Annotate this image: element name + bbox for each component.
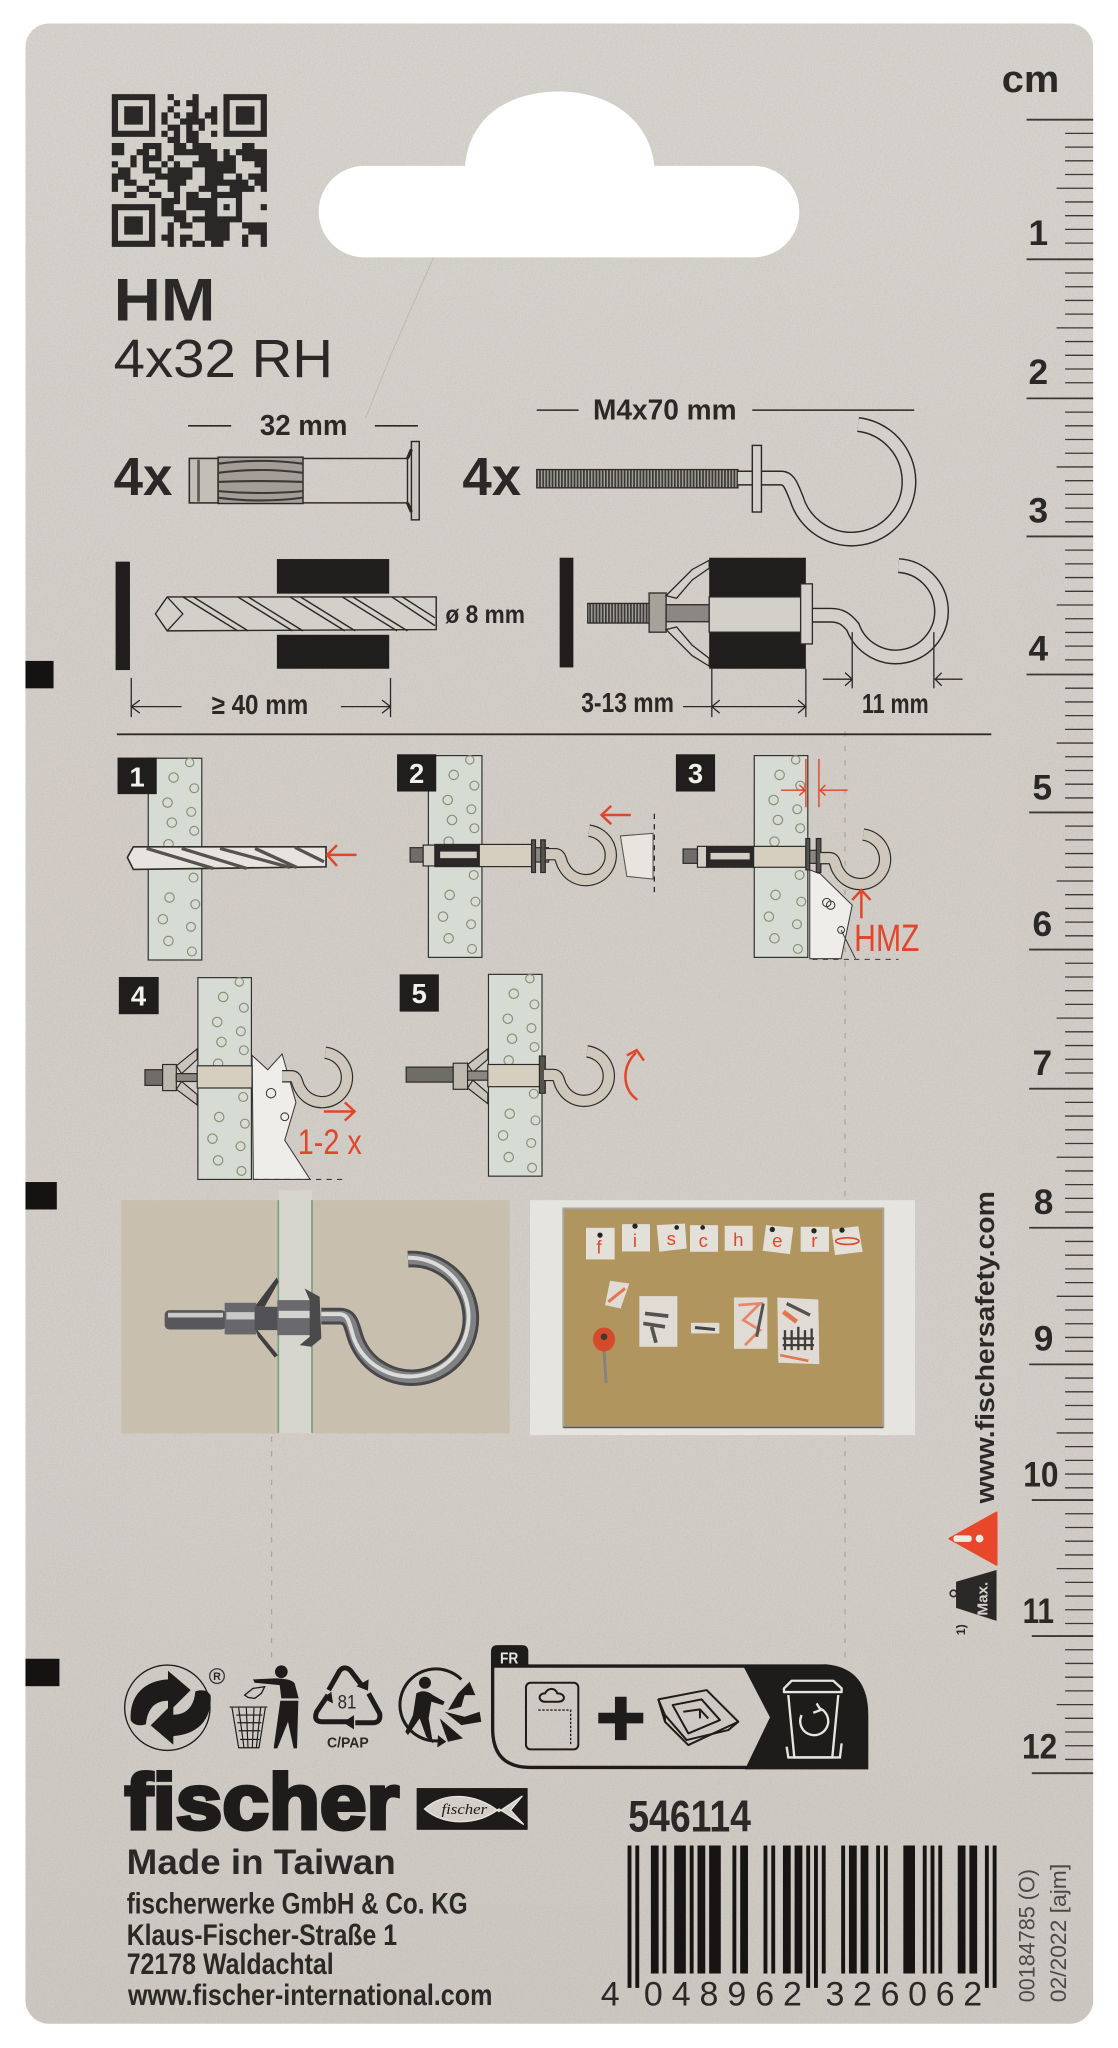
label: 11 mm: 11 mm (862, 688, 929, 719)
QR code (112, 94, 267, 247)
footnote mark: 1) (954, 1624, 968, 1635)
barcode digits: 048962 (644, 1976, 802, 2014)
icon: triman (400, 1669, 481, 1747)
hang hole (319, 91, 799, 257)
icon: tidy person with bin (230, 1665, 299, 1748)
board bar (116, 562, 130, 670)
step 5 (400, 974, 644, 1176)
print date, vertical: 02/2022 [ajm] (1046, 1864, 1071, 2002)
logo: fish mark: fischer (441, 1802, 488, 1818)
mounting tool (252, 1054, 342, 1179)
icon: tray (658, 1690, 738, 1745)
step 4 (119, 977, 362, 1179)
mounting tool (810, 870, 855, 959)
ruler labels: 7 (1032, 1044, 1052, 1083)
red gap marks (781, 759, 848, 807)
wall (198, 978, 251, 1179)
ruler labels: 6 (1032, 905, 1052, 944)
print code, vertical: 00184785 (O) (1014, 1869, 1039, 2002)
step badge (119, 977, 159, 1014)
max weight icon (950, 1570, 997, 1621)
dimension arrows: 40 mm (131, 678, 391, 717)
washer (752, 445, 761, 512)
steel anchor (165, 1277, 321, 1357)
ruler labels: 4 (1029, 629, 1049, 668)
label: 3-13 mm: 3-13 mm (581, 687, 674, 718)
quantity 4x: 4x (114, 448, 173, 507)
photo: installed hook (121, 1190, 510, 1433)
ruler labels: cm (1002, 59, 1059, 101)
panel outline (493, 1666, 827, 1767)
quantity 4x: 4x (462, 448, 521, 507)
barcode digits: 4 (601, 1976, 620, 2014)
manufacturer address: 72178 Waldachtal (127, 1948, 334, 1981)
red arrow (601, 806, 631, 824)
step 2 (397, 754, 654, 957)
warning triangle (950, 1512, 997, 1565)
manufacturer address (127, 1887, 492, 2012)
product row: hook screw (462, 394, 914, 539)
label: 1-2 x: 1-2 x (298, 1123, 362, 1162)
icon: recycling triangle 81 C/PAP (316, 1668, 380, 1752)
installed anchor dimensions diagram (560, 558, 963, 719)
icon: green dot (125, 1665, 224, 1750)
hook (546, 831, 611, 880)
ruler labels: 12 (1022, 1728, 1057, 1767)
drill (127, 847, 326, 869)
ruler labels: 1 (1029, 214, 1048, 253)
drill bit (155, 597, 436, 631)
card letters: f (596, 1236, 602, 1257)
ruler labels: 8 (1034, 1183, 1053, 1222)
product row: anchor (114, 410, 419, 520)
card letters (596, 1228, 817, 1257)
pins and fish mark (597, 1223, 859, 1244)
label: HMZ: HMZ (854, 918, 919, 960)
anchor assembly (683, 839, 821, 872)
flange (801, 584, 812, 644)
step badge (397, 754, 436, 792)
ruler labels: 9 (1034, 1320, 1053, 1359)
wall (488, 974, 542, 1176)
red scissors (593, 1327, 615, 1383)
card letters: h (733, 1229, 744, 1250)
title: HM: HM (114, 267, 216, 334)
wall (428, 756, 482, 957)
black bin area (743, 1664, 868, 1769)
label: M4x70 mm: M4x70 mm (593, 394, 737, 426)
anchor assembly (410, 840, 549, 872)
red arrow up (852, 890, 870, 918)
hook (282, 1053, 347, 1102)
subtitle: 4x32 RH: 4x32 RH (114, 330, 333, 389)
installed anchor (588, 560, 801, 666)
icon: recycling bin (784, 1681, 842, 1757)
registered mark: R (213, 1671, 221, 1683)
step badge (400, 974, 439, 1012)
step badge: 5 (412, 978, 427, 1009)
hook (810, 566, 941, 657)
fold lines (272, 257, 845, 1661)
max weight icon: Max. (974, 1582, 991, 1616)
wall blocks (277, 559, 389, 669)
plus sign (598, 1697, 643, 1740)
step badge: 1 (130, 761, 145, 792)
anchor assembly (406, 1049, 545, 1104)
recycling panel: Triman FR (491, 1645, 868, 1769)
steel hook (321, 1258, 471, 1378)
card letters: c (699, 1230, 708, 1251)
board bar (560, 558, 573, 667)
origin: Made in Taiwan: Made in Taiwan (127, 1843, 396, 1882)
logo: fischer wordmark: fischer (125, 1758, 399, 1846)
logo: fish mark (417, 1788, 528, 1830)
dimension arrows (683, 632, 963, 717)
wall (148, 758, 202, 960)
card letters: e (772, 1230, 783, 1251)
icon: card with hanger (526, 1683, 578, 1749)
step badge: 3 (688, 758, 703, 789)
step 3 (676, 754, 919, 960)
ruler labels: 3 (1029, 491, 1048, 530)
manufacturer address: www.fischer-international.com (127, 1979, 492, 2012)
threaded shaft (537, 470, 738, 488)
anchor assembly (145, 1049, 252, 1105)
card letters: i (633, 1230, 637, 1251)
step badge: 2 (409, 758, 424, 789)
anchor drawing (189, 441, 419, 520)
drilling dimensions diagram (116, 559, 525, 720)
FR tab: FR (500, 1650, 518, 1667)
wall (754, 756, 808, 957)
icon: recycling triangle 81 C/PAP: C/PAP (327, 1736, 369, 1752)
step 1 (118, 758, 357, 960)
ruler labels: 2 (1029, 353, 1048, 392)
icon: recycling triangle 81 C/PAP: 81 (338, 1693, 356, 1714)
ruler: centimetre scale (1002, 59, 1093, 1773)
red rotation arrow (625, 1050, 644, 1100)
red arrow (324, 1102, 355, 1121)
letter cards (586, 1223, 863, 1259)
manufacturer address: fischerwerke GmbH & Co. KG (127, 1887, 468, 1920)
step badge (676, 754, 715, 792)
ruler labels (1002, 59, 1059, 1767)
photo background (121, 1200, 510, 1433)
ruler labels: 5 (1032, 768, 1052, 807)
hook (738, 425, 909, 539)
mat (530, 1200, 915, 1435)
manufacturer address: Klaus-Fischer-Straße 1 (127, 1919, 397, 1952)
bars (628, 1846, 997, 1988)
red arrow (327, 845, 357, 866)
barcode digits (601, 1976, 982, 2014)
label: diameter 8 mm: ø 8 mm (445, 602, 525, 629)
mounting tool (620, 833, 653, 879)
cork board (563, 1208, 883, 1427)
barcode digits: 326062 (825, 1976, 982, 2014)
hook (544, 1051, 609, 1101)
FR tab (491, 1645, 528, 1667)
hook (820, 835, 885, 884)
photo: cork pin board (530, 1200, 915, 1435)
ruler labels: 10 (1023, 1455, 1059, 1494)
step badge: 4 (131, 981, 147, 1012)
wall blocks (709, 558, 806, 669)
article number: 546114 (628, 1793, 751, 1842)
barcode (601, 1846, 997, 2014)
wall section (278, 1190, 312, 1433)
pinned papers (605, 1281, 819, 1364)
website, vertical: www.fischersafety.com (972, 1191, 1000, 1504)
label: 40 mm: ≥ 40 mm (212, 689, 308, 720)
label: 32 mm: 32 mm (260, 410, 347, 442)
card letters: r (811, 1230, 817, 1251)
step badge (118, 758, 157, 794)
ruler labels: 11 (1023, 1592, 1054, 1631)
divider rule (117, 733, 991, 735)
card letters: s (667, 1228, 676, 1249)
side registration marks (25, 661, 59, 1686)
ruler ticks (1027, 120, 1093, 1773)
